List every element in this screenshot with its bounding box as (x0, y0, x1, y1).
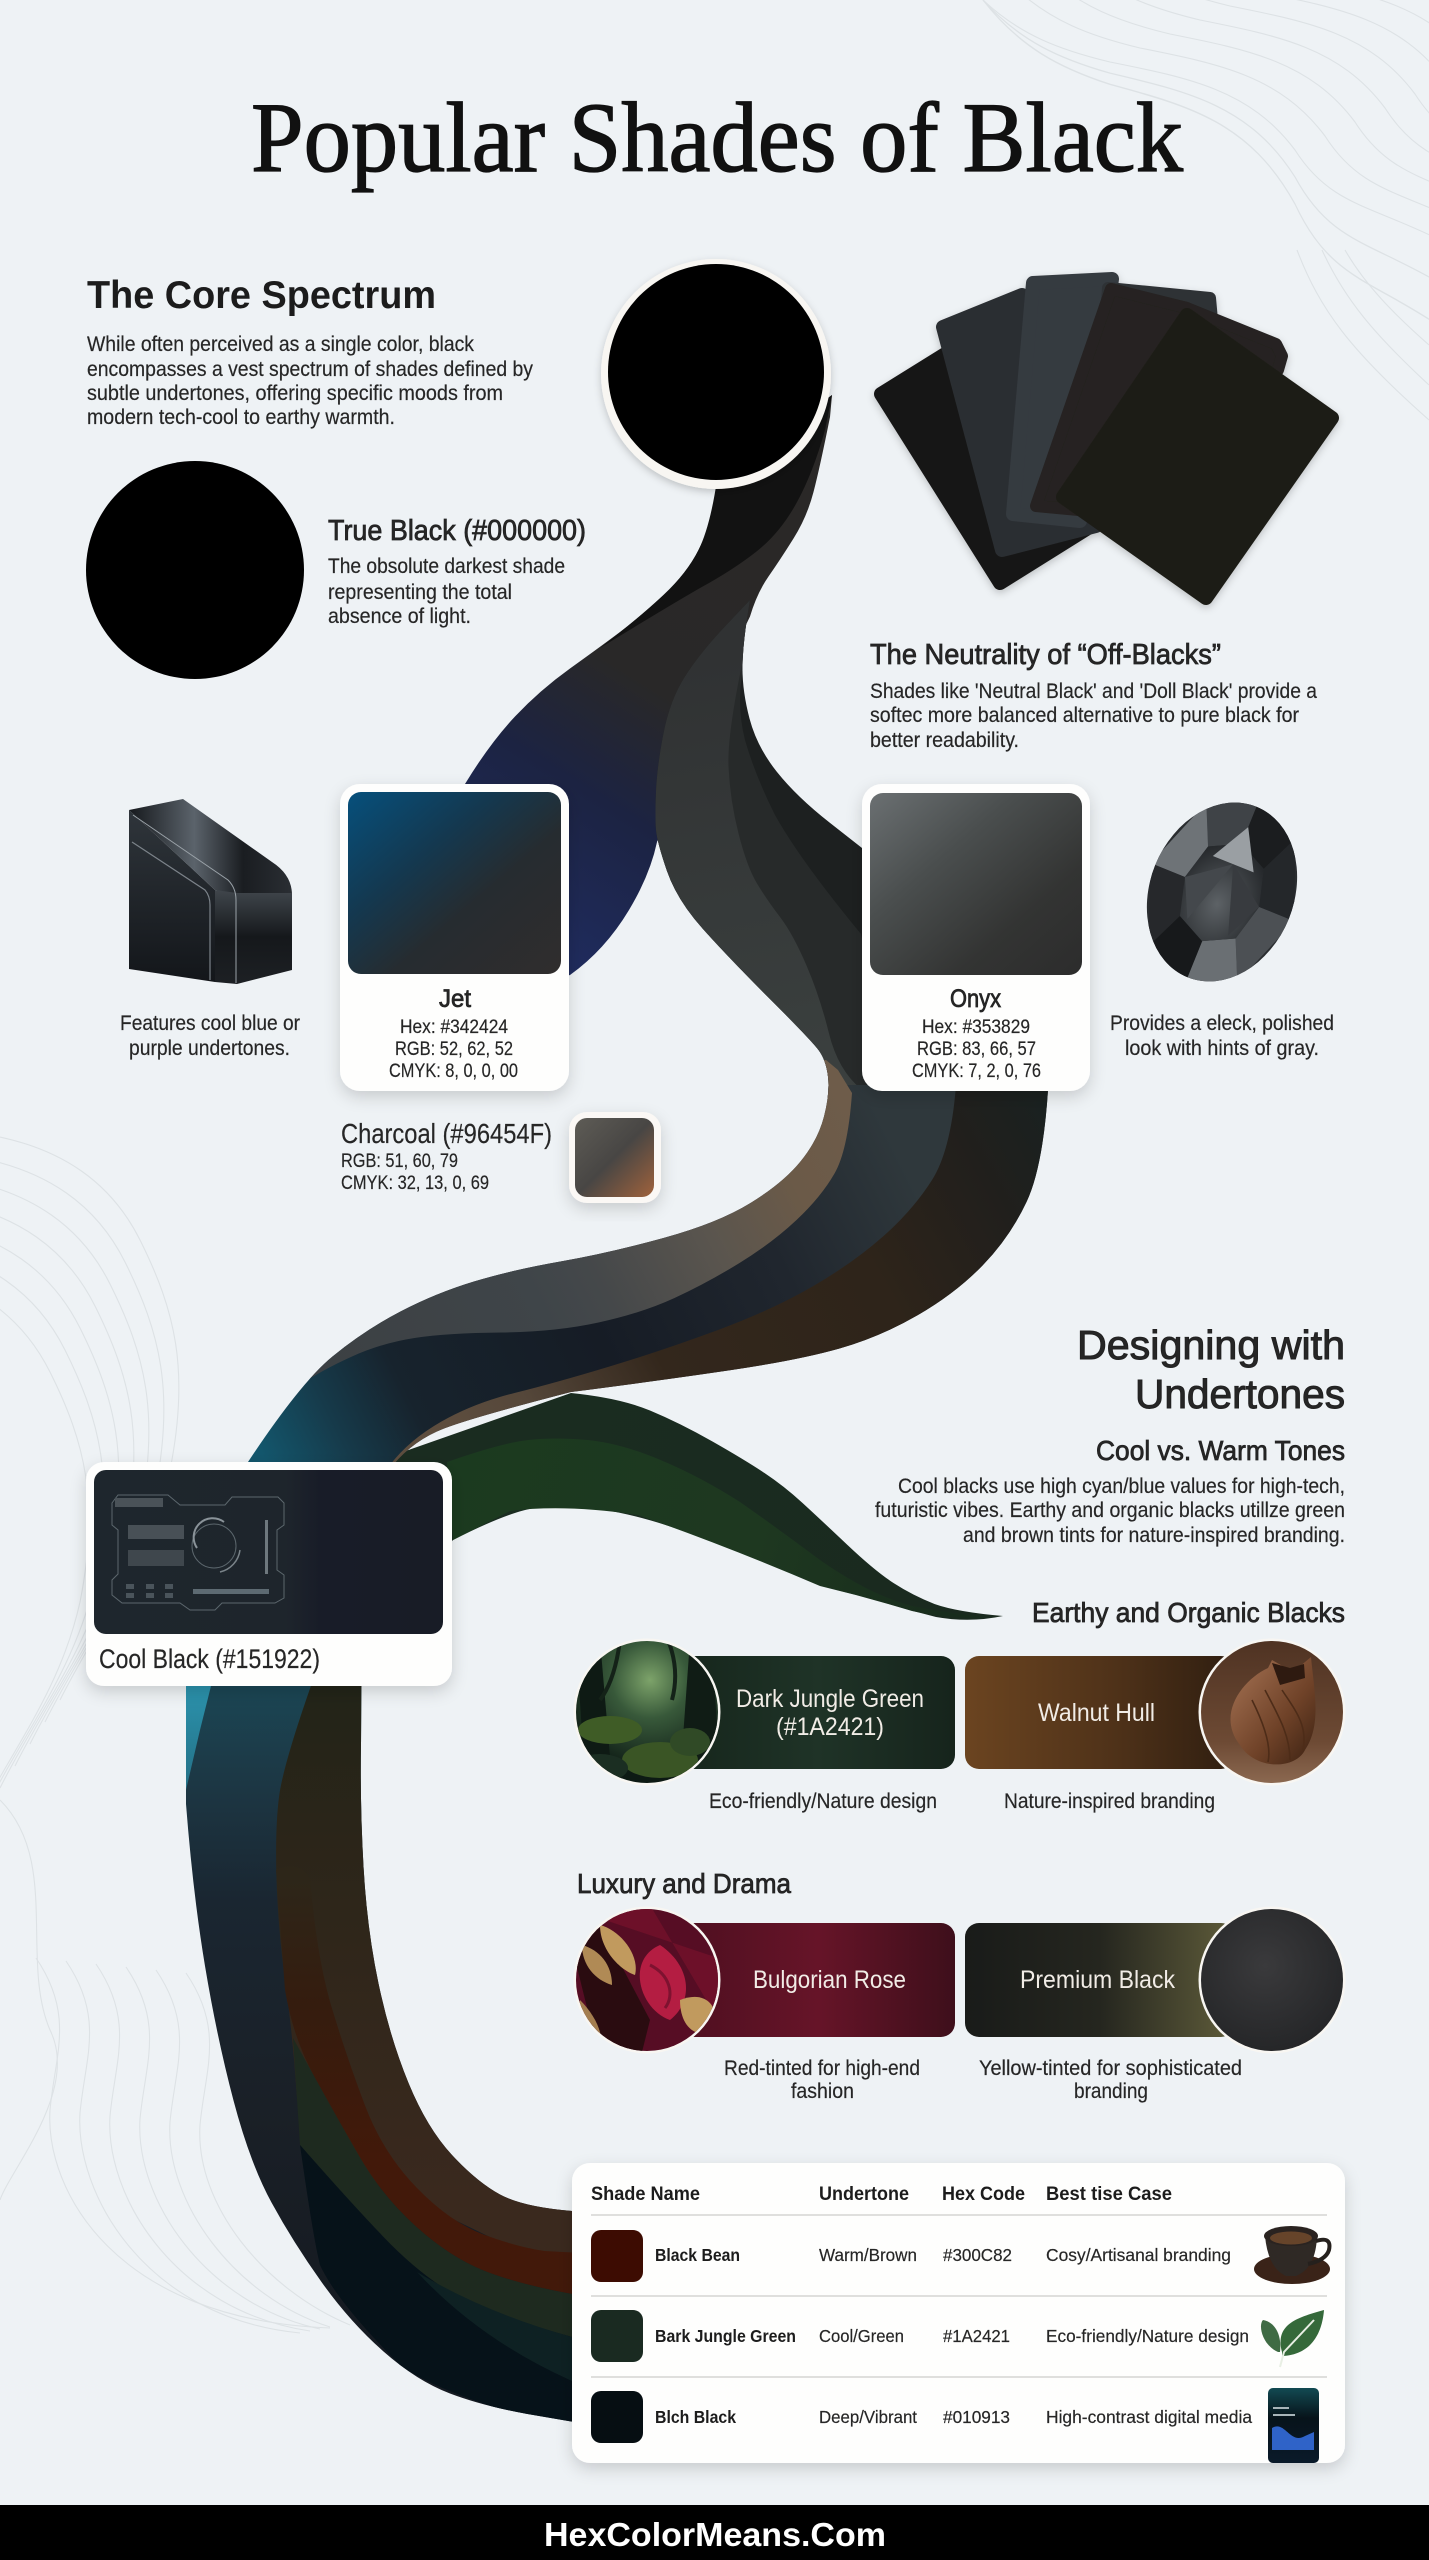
hero black circle with white ring (601, 259, 831, 489)
image: rose brocade circle (570, 1905, 724, 2060)
caption: onyx look: look with hints of gray. (1125, 1037, 1319, 1060)
row: Bark Jungle Green (591, 2310, 1249, 2362)
title: Popular Shades of Black (251, 82, 1183, 193)
row: Bark Jungle Green: #1A2421 (943, 2326, 1010, 2346)
true black label: absence of light. (328, 605, 471, 628)
ribbon: black top band (600, 395, 832, 648)
intro text: encompasses a vest spectrum of shades defined by (87, 358, 533, 381)
section: neutrality of off-blacks: softec more balanced alternative to pure black for (870, 704, 1299, 727)
charcoal label (341, 1118, 552, 1194)
heading: The Core Spectrum (87, 274, 436, 317)
pill: Premium Black: Premium Black (1020, 1966, 1175, 1994)
pill: Bulgarian Rose (680, 1923, 955, 2037)
table header: Shade Name (591, 2184, 700, 2205)
captions: luxury uses (724, 2057, 1242, 2103)
row: Bark Jungle Green: Eco-friendly/Nature design (1046, 2326, 1249, 2346)
captions: earthy uses: Nature-inspired branding (1004, 1790, 1215, 1813)
row: Bark Jungle Green: Bark Jungle Green (655, 2326, 796, 2346)
section: neutrality of off-blacks: The Neutrality of “Off-Blacks” (870, 639, 1221, 671)
pill: Premium Black (965, 1923, 1235, 2037)
row: Blch Black (591, 2391, 1252, 2443)
section: the core spectrum (87, 274, 533, 429)
card: Onyx (862, 784, 1090, 1091)
contour lines: lower left (0, 1800, 350, 2333)
image: forest circle (570, 1636, 724, 1790)
icon: coffee cup (1254, 2226, 1330, 2284)
section: designing with undertones: Undertones (1135, 1371, 1345, 1417)
section: neutrality of off-blacks: Shades like 'Neutral Black' and 'Doll Black' provide a (870, 680, 1317, 703)
HUD interface graphic (112, 1495, 284, 1610)
section: designing with undertones: Designing with (1077, 1322, 1345, 1368)
table card: shades and uses (572, 2163, 1345, 2463)
caption: cool undertones (120, 1012, 300, 1060)
section: designing with undertones: Cool blacks use high cyan/blue values for high-tech, (898, 1475, 1345, 1498)
intro text: subtle undertones, offering specific moods from (87, 382, 503, 405)
card: Cool Black with HUD screen (86, 1462, 452, 1686)
row: Black Bean: #300C82 (943, 2245, 1012, 2265)
table header (591, 2184, 1172, 2205)
card: Jet: Hex: #342424 (400, 1017, 508, 1038)
caption: cool undertones: Features cool blue or (120, 1012, 300, 1035)
intro text: While often perceived as a single color, black (87, 333, 474, 356)
section: neutrality of off-blacks (870, 639, 1317, 752)
row: Black Bean: Cosy/Artisanal branding (1046, 2245, 1231, 2265)
captions: luxury uses: Yellow-tinted for sophisticated (979, 2057, 1242, 2080)
ribbon: green branch (380, 1393, 1003, 1620)
swatch: true black circle (86, 461, 304, 679)
pill: Walnut Hull: Walnut Hull (1038, 1699, 1155, 1727)
caption: onyx look (1110, 1012, 1334, 1060)
card: Jet: CMYK: 8, 0, 0, 00 (389, 1061, 518, 1082)
card: Onyx: CMYK: 7, 2, 0, 76 (912, 1061, 1041, 1082)
captions: luxury uses: branding (1074, 2080, 1148, 2103)
image: walnut vase circle (1198, 1638, 1346, 1786)
charcoal label: Charcoal (#96454F) (341, 1118, 552, 1149)
caption: cool undertones: purple undertones. (129, 1037, 290, 1060)
intro text: modern tech-cool to earthy warmth. (87, 406, 395, 429)
captions: luxury uses: Red-tinted for high-end (724, 2057, 920, 2080)
section: designing with undertones: and brown tints for nature-inspired branding. (963, 1524, 1345, 1547)
contour lines: left edge (0, 1137, 179, 1832)
card: Onyx: RGB: 83, 66, 57 (917, 1039, 1036, 1060)
card: Jet: Jet (439, 985, 471, 1013)
pill: Dark Jungle Green: (#1A2421) (776, 1713, 884, 1741)
icon: fan of black paper swatches (881, 279, 1332, 598)
card: Jet: RGB: 52, 62, 52 (395, 1039, 513, 1060)
row: Black Bean: Warm/Brown (819, 2245, 917, 2265)
section: designing with undertones (875, 1322, 1345, 1547)
pill: Dark Jungle Green (680, 1656, 955, 1769)
swatch: charcoal (569, 1112, 661, 1203)
captions: luxury uses: fashion (791, 2080, 854, 2103)
icon: phone (1268, 2388, 1319, 2463)
row: Bark Jungle Green: Cool/Green (819, 2326, 904, 2346)
table header: Undertone (819, 2184, 909, 2205)
true black label: The obsolute darkest shade (328, 555, 565, 578)
charcoal label: RGB: 51, 60, 79 (341, 1151, 458, 1172)
icon: faceted onyx gem (1146, 802, 1298, 982)
footer bar (0, 2505, 1429, 2560)
card: Jet (340, 784, 569, 1091)
intro text (87, 333, 533, 429)
pill: Bulgarian Rose: Bulgorian Rose (753, 1966, 906, 1994)
card: Onyx: Hex: #353829 (922, 1017, 1030, 1038)
row: Blch Black: Blch Black (655, 2407, 736, 2427)
flowing ribbon of black shades (170, 395, 1100, 2440)
heading: earthy and organic blacks: Earthy and Organic Blacks (1032, 1597, 1345, 1628)
footer bar: HexColorMeans.Com (544, 2516, 886, 2553)
ribbon: middle section (248, 601, 1048, 1462)
captions: earthy uses (709, 1790, 1215, 1813)
charcoal label: CMYK: 32, 13, 0, 69 (341, 1173, 489, 1194)
caption: onyx look: Provides a eleck, polished (1110, 1012, 1334, 1035)
row: Black Bean (591, 2230, 1231, 2282)
row: Black Bean: Black Bean (655, 2245, 740, 2265)
section: designing with undertones: Cool vs. Warm Tones (1096, 1435, 1345, 1466)
ribbon: lower section (186, 1686, 572, 2422)
pill: Dark Jungle Green: Dark Jungle Green (736, 1685, 924, 1713)
captions: earthy uses: Eco-friendly/Nature design (709, 1790, 937, 1813)
row: Blch Black: High-contrast digital media (1046, 2407, 1252, 2427)
section: designing with undertones: futuristic vibes. Earthy and organic blacks utillze green (875, 1499, 1345, 1522)
ribbon: navy lobe (465, 395, 832, 985)
image: premium black circle (1198, 1906, 1346, 2054)
card: Onyx: Onyx (950, 985, 1001, 1013)
card: Cool Black with HUD screen: Cool Black (#151922) (99, 1644, 320, 1674)
table header: Hex Code (942, 2184, 1025, 2205)
contour lines: top right (983, 0, 1429, 420)
heading: luxury and drama: Luxury and Drama (577, 1868, 791, 1899)
pill: Walnut Hull (965, 1656, 1235, 1769)
icon: metallic block (129, 799, 292, 984)
true black label (328, 515, 586, 628)
true black label: representing the total (328, 581, 512, 604)
row: Blch Black: #010913 (943, 2407, 1010, 2427)
table header: Best tise Case (1046, 2184, 1172, 2205)
true black label: True Black (#000000) (328, 515, 586, 547)
section: neutrality of off-blacks: better readability. (870, 729, 1019, 752)
row: Blch Black: Deep/Vibrant (819, 2407, 917, 2427)
icon: green leaf (1261, 2310, 1324, 2367)
